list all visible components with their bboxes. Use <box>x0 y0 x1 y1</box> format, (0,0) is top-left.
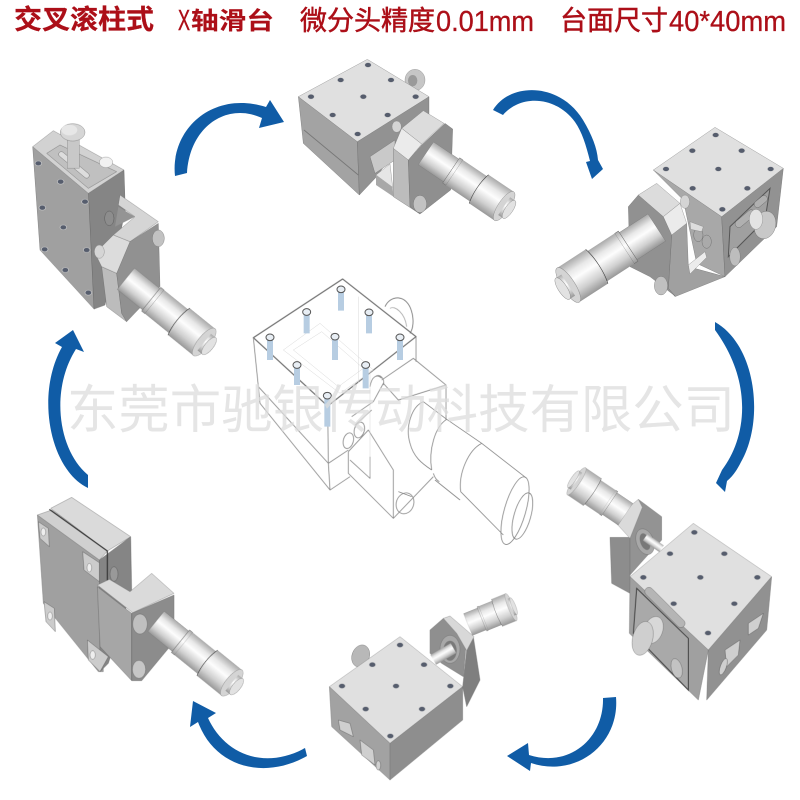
product: left vertical view <box>33 124 223 362</box>
product: lower left back view <box>37 497 250 702</box>
product: lower right view <box>562 464 772 700</box>
arrow: top right <box>493 90 603 179</box>
title: 40*40mm <box>669 6 786 38</box>
arrow: bottom left <box>190 701 307 768</box>
product: upper right view <box>548 127 783 308</box>
arrow: right <box>715 322 754 492</box>
arrow: bottom right <box>507 697 616 771</box>
watermark: 东莞市驰银传动科技有限公司 <box>67 382 735 440</box>
product: top view <box>298 59 522 226</box>
arrow: top left <box>175 100 284 176</box>
center pins <box>266 286 404 427</box>
title: X <box>178 5 190 37</box>
title: 轴滑台 <box>191 7 274 35</box>
title: 0.01mm <box>436 6 534 38</box>
arrow: left <box>48 330 88 488</box>
center transparent line drawing <box>253 279 537 547</box>
title: 交叉滚柱式 <box>14 5 154 35</box>
product: bottom view <box>329 592 521 780</box>
title <box>14 5 786 38</box>
title: 微分头精度 <box>300 6 435 36</box>
title: 台面尺寸 <box>560 6 668 36</box>
